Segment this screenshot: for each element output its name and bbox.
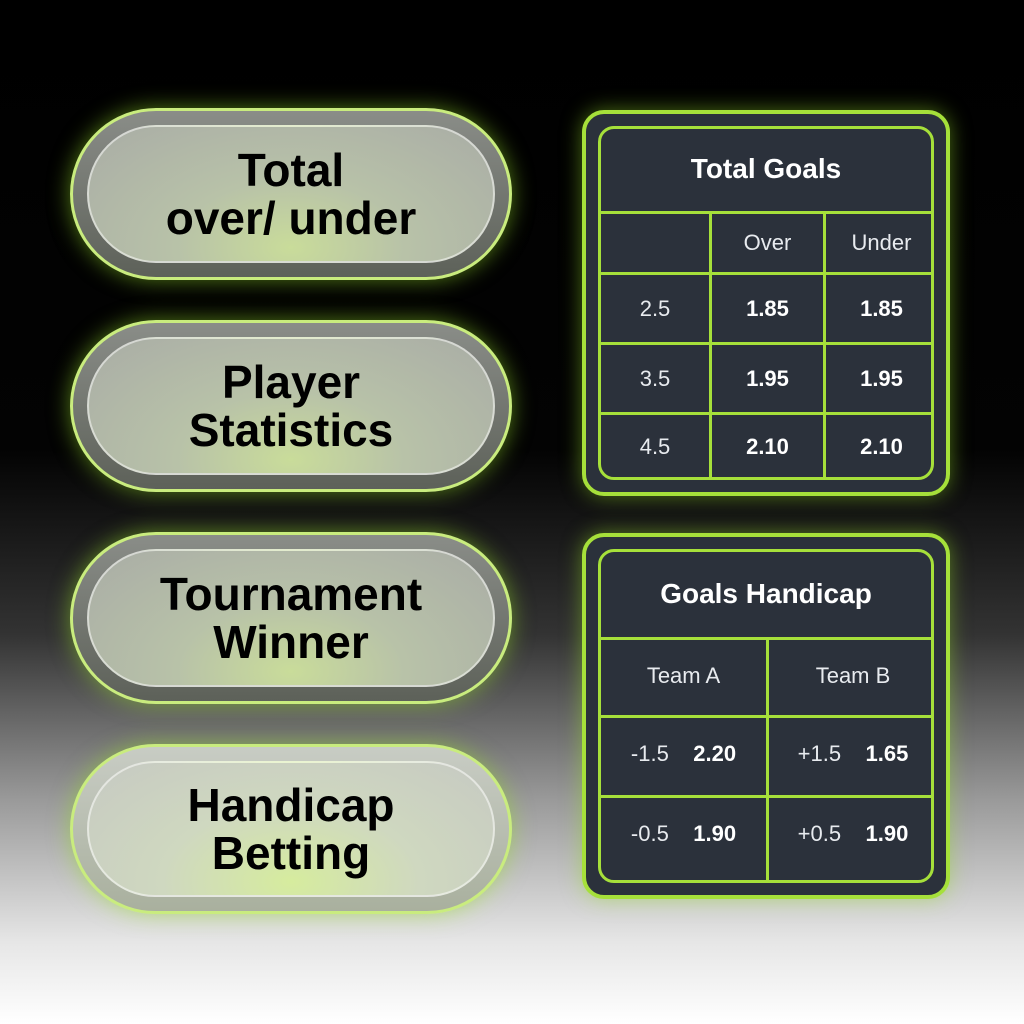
heading: Total Goals: Total Goals	[691, 153, 841, 184]
table: Goals Handicap: +1.5	[798, 741, 841, 766]
table: Total Goals: 1.95	[860, 366, 903, 390]
pill: Player Statistics	[70, 320, 512, 492]
row: 4.5: 4.5	[640, 434, 670, 459]
pill: Handicap Betting: Handicap	[187, 779, 395, 831]
pill: Total over/ under: Total	[238, 144, 344, 196]
pill: Total over/ under	[70, 108, 512, 280]
pill: Tournament Winner	[70, 532, 512, 704]
row: 1.5: -1.5	[631, 741, 669, 766]
pill: Player Statistics: Statistics	[189, 404, 393, 456]
pill: Tournament Winner: Winner	[213, 616, 369, 668]
row: 1.5: 2.20	[693, 741, 736, 766]
pill: Tournament Winner: Tournament	[160, 568, 422, 620]
table: Total Goals: Under	[852, 230, 911, 255]
row: 0.5: 1.90	[693, 821, 736, 846]
table: Total Goals: 2.10	[746, 434, 789, 459]
pill: Total over/ under: over/ under	[166, 192, 416, 244]
table: Goals Handicap	[582, 533, 950, 899]
row: 1.5	[631, 741, 736, 766]
pill: Handicap Betting: Betting	[212, 827, 370, 879]
table: Total Goals: 1.85	[746, 296, 789, 320]
row: header: Over	[744, 230, 791, 255]
row: 3.5: 3.5	[640, 366, 670, 390]
row: 2.5: 2.5	[640, 296, 670, 320]
row: 0.5	[631, 821, 736, 846]
table: Goals Handicap: 1.65	[866, 741, 908, 766]
table: Total Goals: 1.85	[860, 296, 903, 320]
table: Total Goals	[582, 110, 950, 496]
row: teams: Team A	[647, 663, 720, 688]
table: Goals Handicap: Team B	[816, 663, 890, 688]
row: 0.5: -0.5	[631, 821, 669, 846]
table: Goals Handicap: 1.90	[866, 821, 908, 846]
table: Total Goals: 2.10	[860, 434, 903, 459]
table: Total Goals: 1.95	[746, 366, 789, 390]
pill: Player Statistics: Player	[222, 356, 360, 408]
table: Goals Handicap: +0.5	[798, 821, 841, 846]
pill: Handicap Betting	[70, 744, 512, 914]
heading: Goals Handicap: Goals Handicap	[660, 578, 872, 608]
